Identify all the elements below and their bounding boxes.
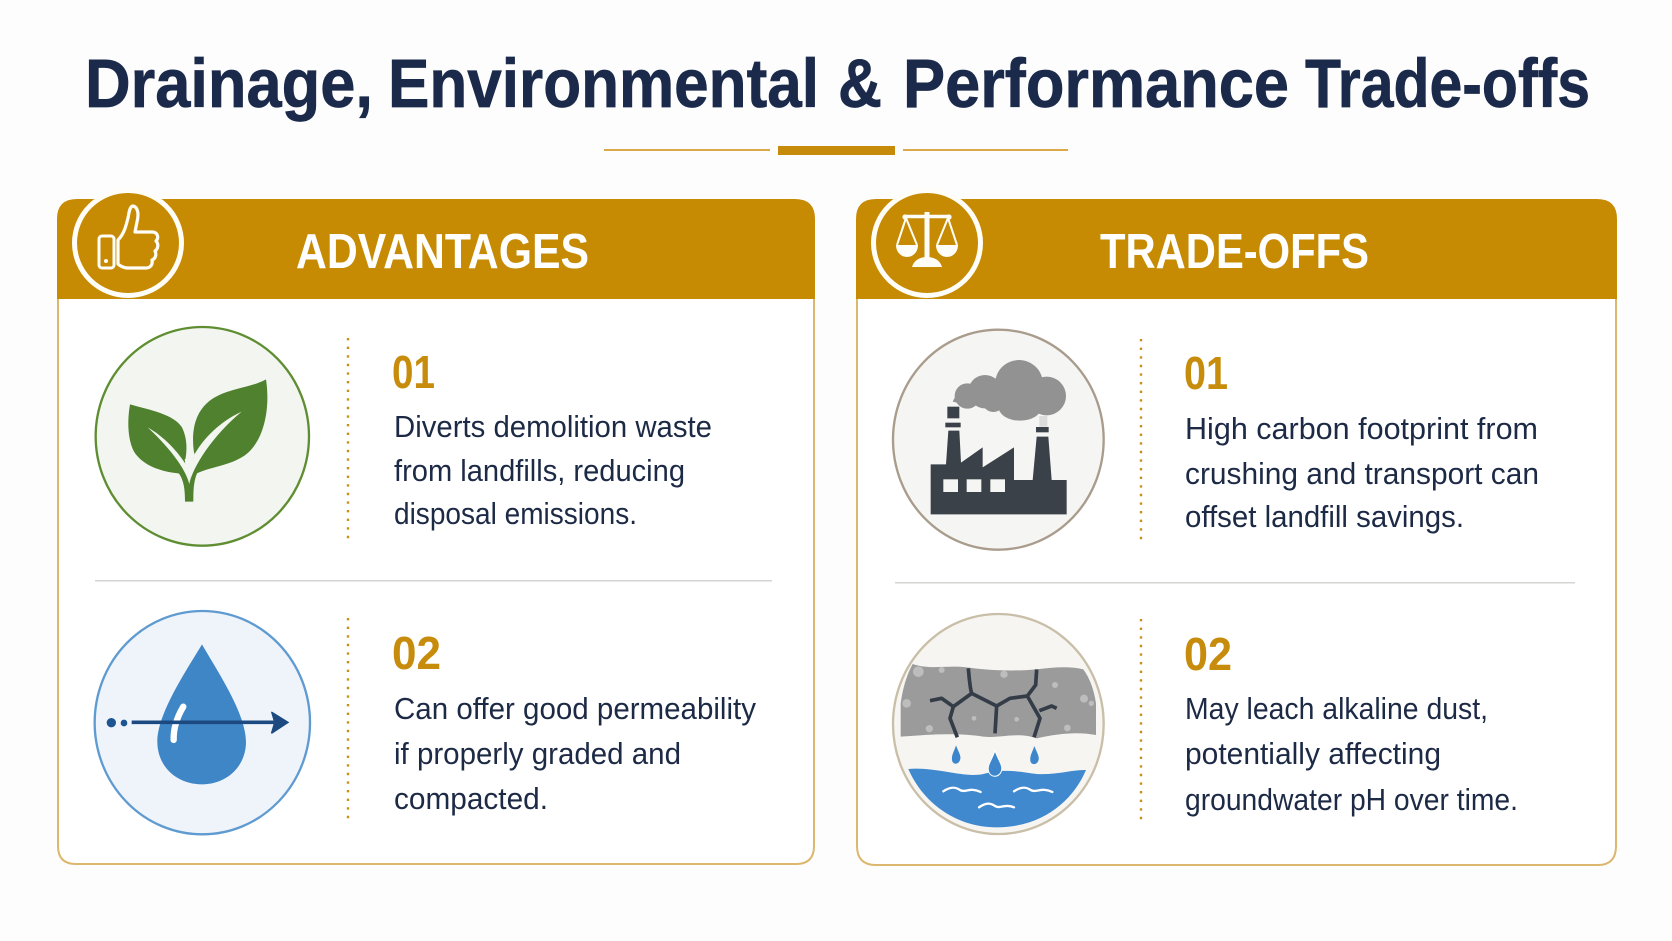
title: [85, 45, 1590, 122]
item 02 text: groundwater pH over time.: [1185, 782, 1518, 817]
title: Environmental: [388, 45, 819, 122]
dotted separator: [1140, 339, 1142, 545]
item 01 text: High carbon footprint from: [1185, 411, 1538, 446]
divider: [95, 580, 772, 582]
title: &: [838, 45, 882, 122]
header label: trade-offs: TRADE-OFFS: [1100, 225, 1369, 279]
icon: water drop with arrow: [95, 611, 310, 834]
icon: cracked ground leaching into groundwater: [893, 614, 1104, 834]
title underline rule: [604, 146, 1068, 155]
header bar: trade-offs: [856, 199, 1617, 299]
panel: trade-offs: [856, 190, 1617, 865]
item 01 number: 01: [1184, 347, 1228, 399]
item 02 text: potentially affecting: [1185, 736, 1441, 771]
item 01 text: disposal emissions.: [394, 496, 637, 531]
panel body: [857, 298, 1616, 865]
item 01 text: Diverts demolition waste: [394, 409, 712, 444]
item 01 text: [1185, 411, 1539, 534]
header label: advantages: ADVANTAGES: [296, 225, 589, 279]
item 01 text: from landfills, reducing: [394, 453, 685, 488]
header bar: advantages: [57, 199, 815, 299]
item 02 number: 02: [392, 627, 441, 679]
title: Performance: [903, 45, 1289, 122]
title: Drainage,: [85, 45, 373, 122]
item 01 number: 01: [392, 346, 435, 398]
header icon: balance scales: [874, 190, 980, 296]
item 02 text: if properly graded and: [394, 736, 681, 771]
icon: factory with smoke: [893, 330, 1104, 550]
panel body: [58, 298, 814, 864]
item 02 text: Can offer good permeability: [394, 691, 756, 726]
item 02 text: [1185, 691, 1518, 817]
panel: advantages: [57, 190, 815, 864]
item 01 text: offset landfill savings.: [1185, 499, 1464, 534]
icon: green leaves: [96, 327, 309, 546]
item 02 number: 02: [1184, 628, 1232, 680]
item 01 text: [394, 409, 712, 531]
dotted separator: [347, 338, 349, 542]
header icon: thumbs up: [74, 190, 182, 296]
item 02 text: [394, 691, 756, 816]
dotted separator: [1140, 619, 1142, 825]
title: Trade-offs: [1305, 45, 1590, 122]
item 02 text: May leach alkaline dust,: [1185, 691, 1488, 726]
item 02 text: compacted.: [394, 781, 548, 816]
divider: [895, 582, 1575, 584]
dotted separator: [347, 618, 349, 823]
item 01 text: crushing and transport can: [1185, 456, 1539, 491]
